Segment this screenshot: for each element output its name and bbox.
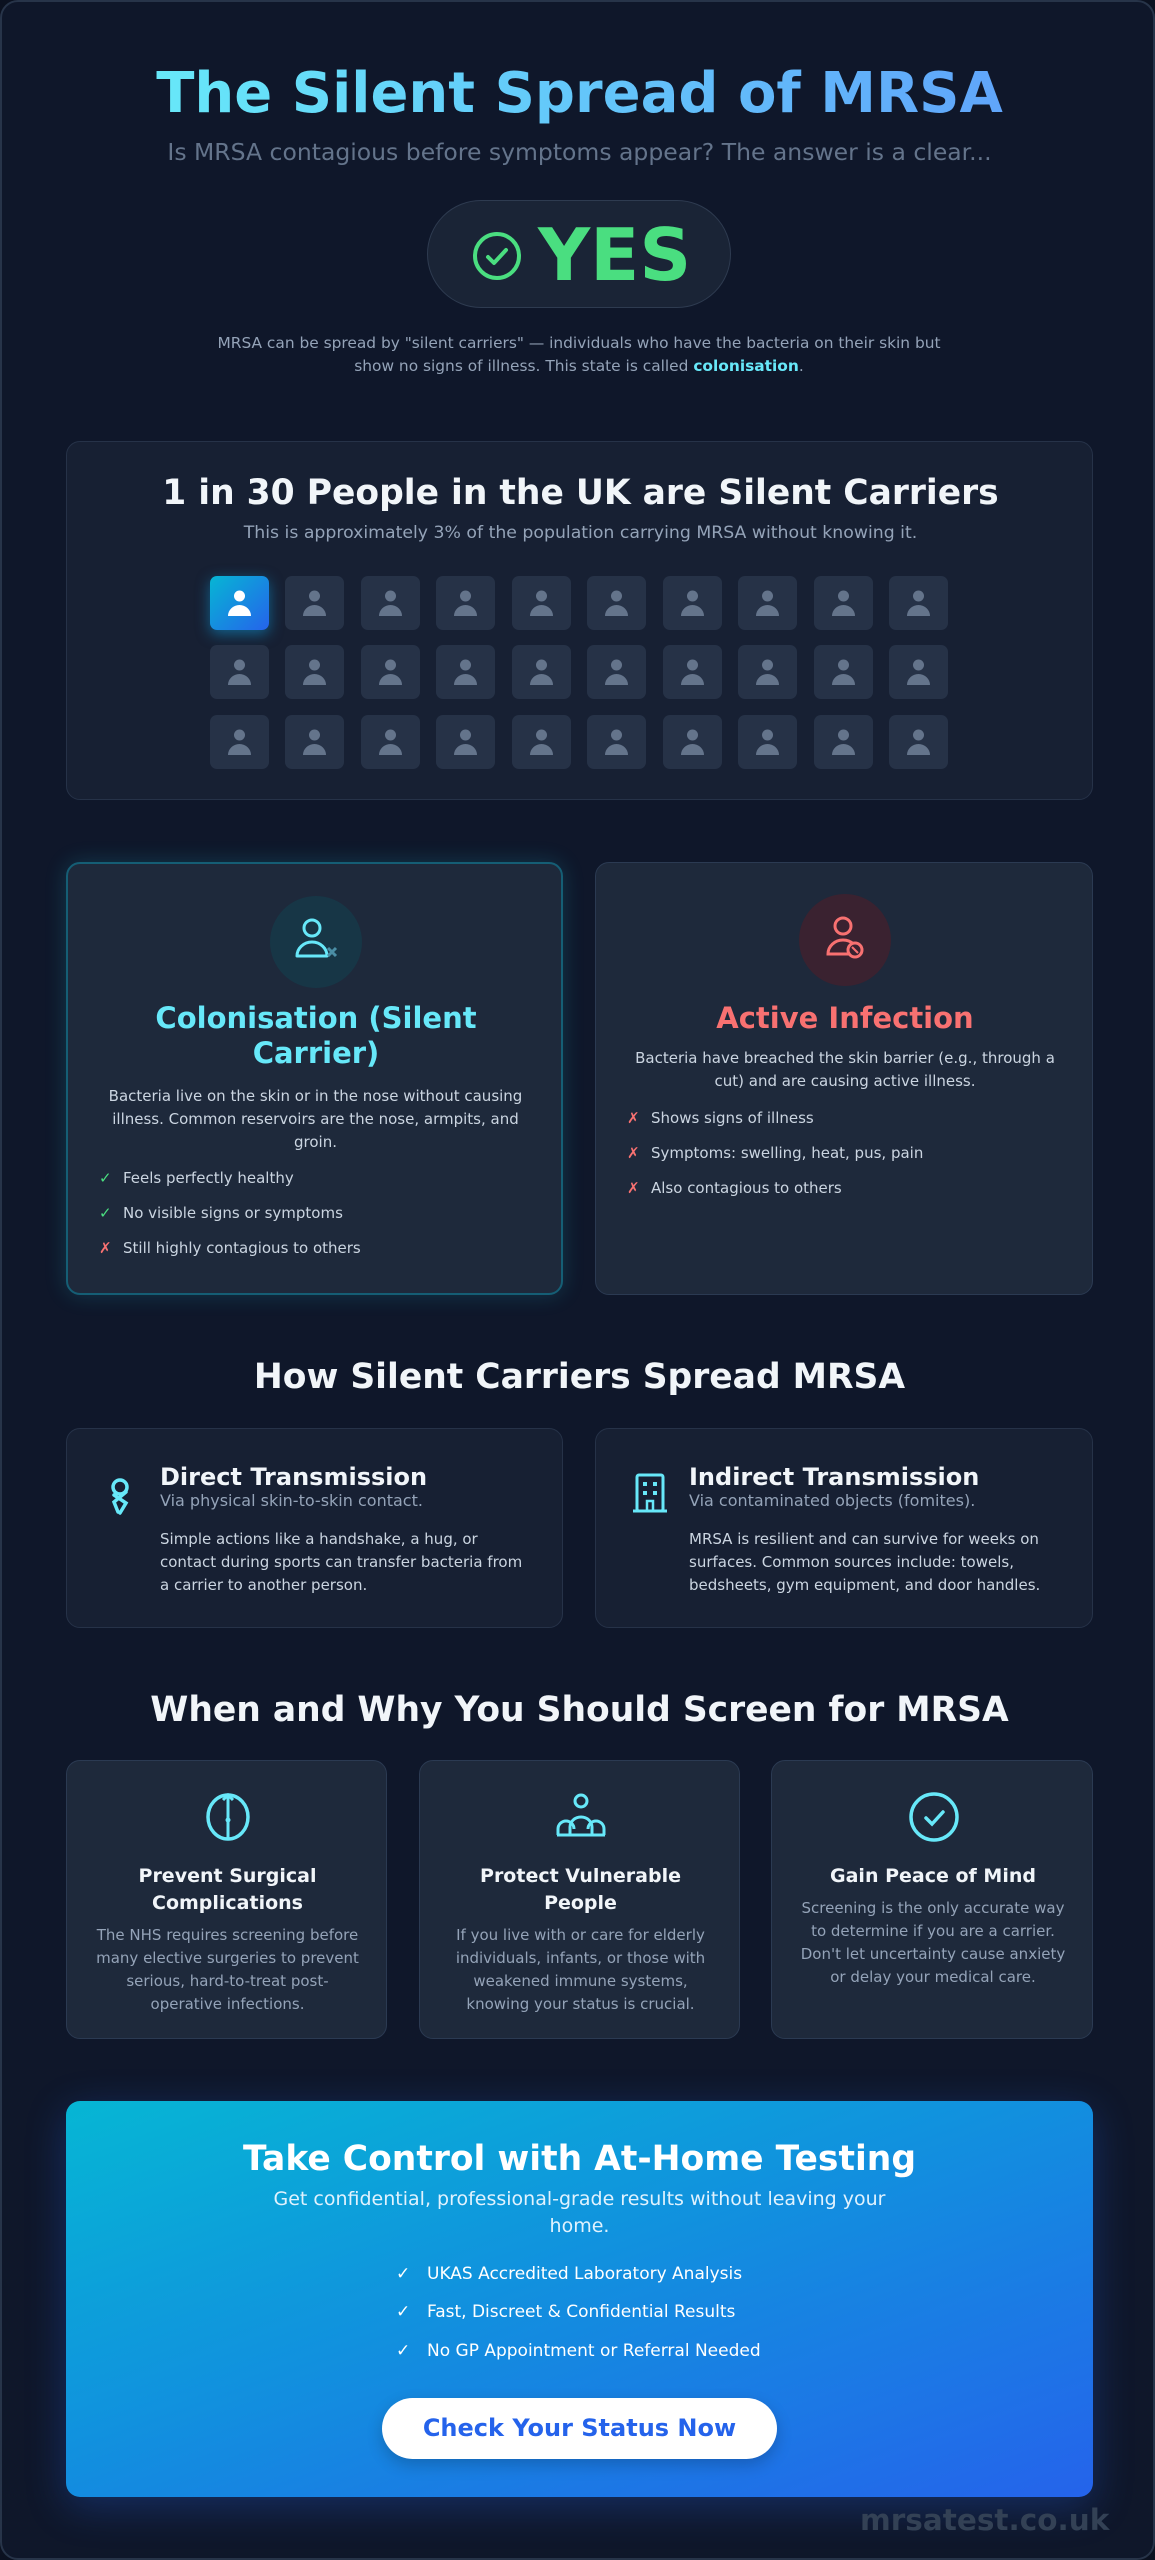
intro text: MRSA can be spread by "silent carriers" — individuals who have the bacteria on their skin but show no signs of illness. This state is called colonisation. bbox=[217, 334, 941, 375]
icon: silent carrier bbox=[270, 896, 362, 988]
list bbox=[627, 1109, 923, 1197]
description: The NHS requires screening before many elective surgeries to prevent serious, hard-to-treat post-operative infections. bbox=[96, 1926, 359, 2013]
heading: Take Control with At-Home Testing bbox=[243, 2139, 916, 2179]
panel: call to action bbox=[66, 2101, 1093, 2497]
panel: active infection: ✗ bbox=[627, 1179, 640, 1197]
icon: people bbox=[556, 1794, 606, 1836]
icon: infected person bbox=[799, 894, 891, 986]
subheading: Via contaminated objects (fomites). bbox=[689, 1491, 975, 1510]
list: Still highly contagious to others bbox=[123, 1239, 361, 1257]
people grid bbox=[202, 572, 948, 769]
panel: colonisation bbox=[66, 862, 563, 1295]
title: The Silent Spread of MRSA bbox=[156, 61, 1003, 126]
panel: indirect transmission bbox=[595, 1428, 1093, 1628]
icon: check bbox=[909, 1792, 959, 1842]
panel: peace of mind bbox=[771, 1760, 1093, 2039]
benefits list: ✓ bbox=[396, 2341, 410, 2361]
icon: contact bbox=[111, 1478, 129, 1515]
panel: active infection: ✗ bbox=[627, 1109, 640, 1127]
panel: active infection bbox=[595, 862, 1093, 1295]
stat heading: 1 in 30 People in the UK are Silent Carriers bbox=[162, 473, 999, 513]
panel: statistics bbox=[66, 441, 1093, 800]
benefits list: No GP Appointment or Referral Needed bbox=[427, 2341, 761, 2361]
description: Bacteria live on the skin or in the nose without causing illness. Common reservoirs are the nose, armpits, and groin. bbox=[109, 1087, 522, 1151]
description: Bacteria have breached the skin barrier (e.g., through a cut) and are causing active illness. bbox=[635, 1049, 1055, 1090]
heading: Protect Vulnerable People bbox=[480, 1865, 681, 1914]
list: Shows signs of illness bbox=[651, 1109, 814, 1127]
button: Check Your Status Now bbox=[423, 2414, 736, 2442]
button bbox=[382, 2398, 777, 2459]
list bbox=[99, 1169, 361, 1257]
list: Also contagious to others bbox=[651, 1179, 842, 1197]
panel: colonisation: ✗ bbox=[99, 1239, 112, 1257]
benefits list bbox=[396, 2264, 761, 2361]
heading: Active Infection bbox=[716, 1001, 974, 1035]
panel: colonisation: ✓ bbox=[99, 1204, 112, 1222]
yes badge bbox=[427, 200, 731, 308]
benefits list: UKAS Accredited Laboratory Analysis bbox=[427, 2264, 742, 2284]
icon: check circle bbox=[473, 232, 521, 280]
list: Symptoms: swelling, heat, pus, pain bbox=[651, 1144, 923, 1162]
panel: vulnerable bbox=[419, 1760, 740, 2039]
body: Simple actions like a handshake, a hug, or contact during sports can transfer bacteria from a carrier to another person. bbox=[160, 1530, 522, 1594]
panel: surgical bbox=[66, 1760, 387, 2039]
heading: Gain Peace of Mind bbox=[830, 1865, 1036, 1887]
icon: building bbox=[633, 1474, 667, 1512]
section heading: spread: How Silent Carriers Spread MRSA bbox=[254, 1357, 905, 1397]
benefits list: ✓ bbox=[396, 2302, 410, 2322]
subtext: Get confidential, professional-grade results without leaving your home. bbox=[274, 2188, 885, 2237]
panel: direct transmission bbox=[66, 1428, 563, 1628]
heading: Indirect Transmission bbox=[689, 1463, 979, 1491]
list: Feels perfectly healthy bbox=[123, 1169, 294, 1187]
section heading: screening: When and Why You Should Screen for MRSA bbox=[150, 1690, 1009, 1730]
panel: colonisation: ✓ bbox=[99, 1169, 112, 1187]
subtitle: Is MRSA contagious before symptoms appear? The answer is a clear... bbox=[167, 138, 992, 166]
heading: Prevent Surgical Complications bbox=[139, 1865, 316, 1914]
subheading: Via physical skin-to-skin contact. bbox=[160, 1491, 423, 1510]
watermark: mrsatest.co.uk bbox=[860, 2503, 1109, 2537]
description: If you live with or care for elderly individuals, infants, or those with weakened immune systems, knowing your status is crucial. bbox=[456, 1926, 705, 2013]
body: MRSA is resilient and can survive for weeks on surfaces. Common sources include: towels, bedsheets, gym equipment, and door handles. bbox=[689, 1530, 1040, 1594]
list: No visible signs or symptoms bbox=[123, 1204, 343, 1222]
benefits list: Fast, Discreet & Confidential Results bbox=[427, 2302, 735, 2322]
yes badge: YES bbox=[538, 213, 691, 297]
heading: Direct Transmission bbox=[160, 1463, 427, 1491]
description: Screening is the only accurate way to determine if you are a carrier. Don't let uncertainty cause anxiety or delay your medical care. bbox=[801, 1899, 1065, 1986]
benefits list: ✓ bbox=[396, 2264, 410, 2284]
icon: scalpel bbox=[206, 1793, 250, 1841]
heading: Colonisation (Silent Carrier) bbox=[155, 1001, 477, 1070]
panel: active infection: ✗ bbox=[627, 1144, 640, 1162]
stat subtext: This is approximately 3% of the population carrying MRSA without knowing it. bbox=[244, 523, 917, 543]
